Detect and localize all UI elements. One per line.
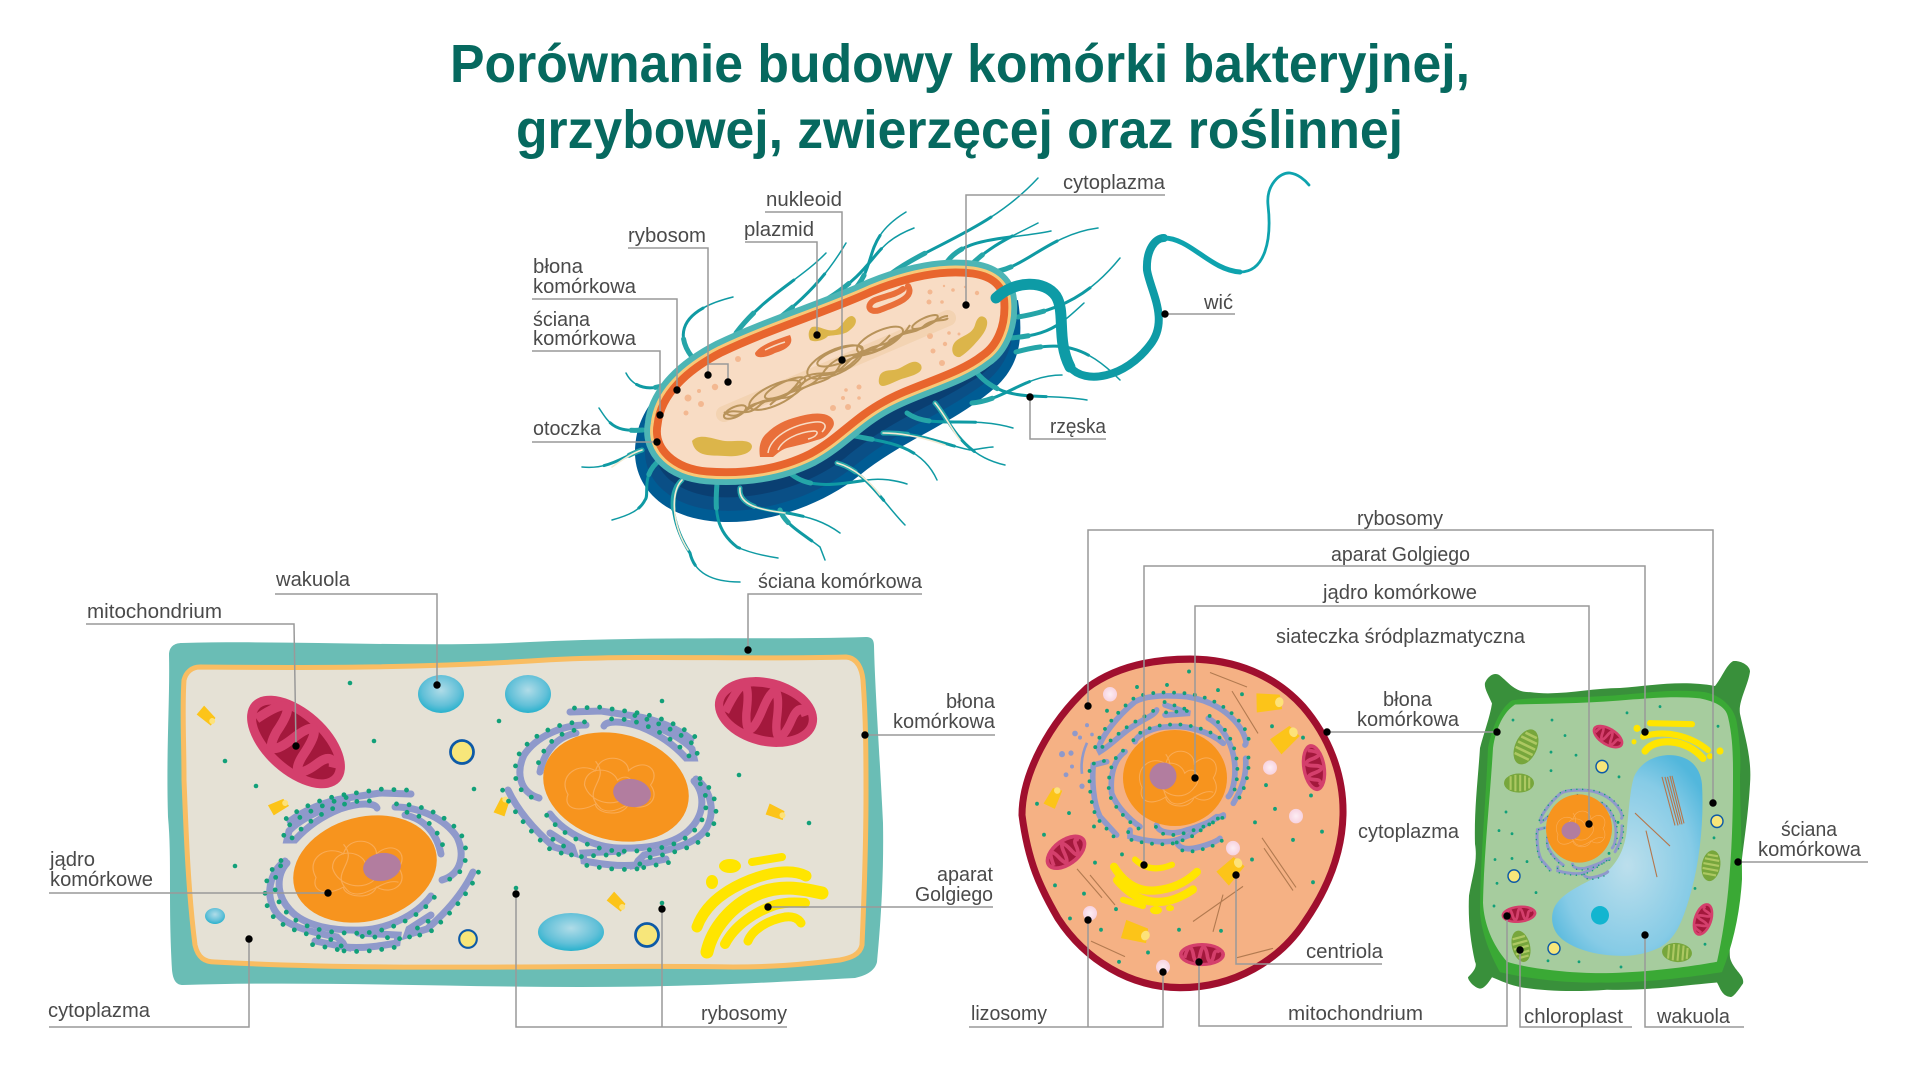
Golgi apparatus <box>1114 860 1197 914</box>
label: aparat Golgiego: aparat <box>937 864 993 886</box>
centrioles <box>195 704 788 915</box>
Golgi apparatus <box>697 857 822 952</box>
label: chloroplast <box>1516 946 1632 1028</box>
cell membrane and cytoplasm <box>183 657 866 967</box>
cell envelope and cytoplasm <box>657 272 1004 472</box>
label: mitochondrium <box>86 601 300 750</box>
vacuole contents <box>1591 776 1684 925</box>
label: ściana komórkowa: ściana komórkowa <box>758 571 923 593</box>
label: błona komórkowa <box>861 691 996 739</box>
cell body <box>1022 659 1343 988</box>
label: rzęska <box>1026 393 1107 439</box>
label: aparat Golgiego <box>1140 544 1649 869</box>
label: błona komórkowa: komórkowa <box>893 711 996 733</box>
label: błona komórkowa: błona <box>533 256 584 278</box>
label: błona komórkowa: komórkowa <box>533 276 637 298</box>
label: jądro komórkowe: jądro <box>49 849 95 871</box>
cell membrane <box>1480 691 1742 983</box>
label: wakuola <box>1641 931 1744 1028</box>
label: siateczka śródplazmatyczna: siateczka śródplazmatyczna <box>1276 626 1526 648</box>
label: wić: wić <box>1203 292 1233 314</box>
label: ściana komórkowa <box>532 309 664 419</box>
label: ściana komórkowa <box>1734 819 1868 866</box>
label: centriola <box>1232 871 1384 964</box>
endoplasmic reticulum and nucleus <box>1536 789 1624 879</box>
label: cytoplazma <box>48 935 253 1027</box>
label: rybosom <box>628 225 732 386</box>
label: jądro komórkowe: komórkowe <box>50 869 153 891</box>
illustration: animal cell <box>1022 659 1343 988</box>
illustration: bacterium <box>582 173 1309 582</box>
mitochondria <box>1039 742 1330 966</box>
smooth ER fragments <box>1059 723 1094 789</box>
ribosomes <box>1035 670 1324 964</box>
label: ściana komórkowa: ściana <box>533 309 591 331</box>
cell wall <box>1468 661 1750 997</box>
title: grzybowej, zwierzęcej oraz roślinnej <box>516 100 1403 160</box>
label: rybosomy: rybosomy <box>1357 508 1443 530</box>
vesicles <box>1508 760 1723 955</box>
shared labels: animal and plant cells <box>1084 508 1717 1026</box>
label: lizosomy: lizosomy <box>971 1003 1047 1025</box>
label: ściana komórkowa: komórkowa <box>533 328 637 350</box>
label: ściana komórkowa <box>744 571 923 654</box>
label: rzęska: rzęska <box>1050 416 1107 438</box>
panel: animal cell <box>969 659 1460 1027</box>
panel: plant cell <box>1468 661 1868 1028</box>
vesicles <box>450 740 658 948</box>
label: mitochondrium: mitochondrium <box>1288 1003 1423 1025</box>
label: otoczka <box>532 418 661 446</box>
label: wakuola: wakuola <box>275 569 351 591</box>
endoplasmic reticulum and nucleus 1 <box>265 789 478 951</box>
label: plazmid <box>744 219 821 339</box>
centrioles <box>1042 690 1303 951</box>
label: rybosomy <box>512 890 787 1027</box>
pili and fimbriae <box>582 178 1120 582</box>
lysosomes <box>1083 687 1303 974</box>
label: cytoplazma: cytoplazma <box>48 1000 151 1022</box>
label: centriola: centriola <box>1306 941 1384 963</box>
label: błona komórkowa <box>1323 689 1501 736</box>
label: jądro komórkowe <box>1191 582 1593 828</box>
label: mitochondrium <box>1195 912 1511 1026</box>
ribosomes <box>1493 705 1719 968</box>
ribosomes <box>223 681 811 905</box>
central vacuole <box>1552 755 1702 956</box>
label: jądro komórkowe: jądro komórkowe <box>1322 582 1477 604</box>
label: aparat Golgiego <box>764 864 993 911</box>
mitochondria <box>230 667 825 806</box>
label: rybosomy <box>1084 508 1717 807</box>
capsule back <box>635 300 1020 522</box>
nucleoid <box>722 312 948 422</box>
label: rybosom: rybosom <box>628 225 706 247</box>
label: ściana komórkowa: ściana <box>1781 819 1838 841</box>
panel: fungal cell <box>48 569 996 1027</box>
Golgi apparatus <box>1632 723 1724 759</box>
label: błona komórkowa: komórkowa <box>1357 709 1460 731</box>
label: aparat Golgiego: aparat Golgiego <box>1331 544 1470 566</box>
endoplasmic reticulum and nucleus <box>1089 692 1249 852</box>
label: cytoplazma: cytoplazma <box>1358 821 1460 843</box>
cell wall <box>167 637 883 987</box>
label: mitochondrium: mitochondrium <box>87 601 222 623</box>
illustration: plant cell <box>1468 661 1750 997</box>
cytoskeleton fibres <box>1077 673 1296 958</box>
mesosomes <box>755 286 909 457</box>
cream cores of fimbriae <box>612 403 960 550</box>
label: ściana komórkowa: komórkowa <box>1758 839 1862 861</box>
inclusions <box>692 316 987 456</box>
label: rybosomy: rybosomy <box>701 1003 787 1025</box>
label: wakuola <box>275 569 441 689</box>
cytoplasm <box>1483 697 1733 973</box>
mitochondria <box>1501 720 1717 939</box>
endoplasmic reticulum and nucleus 2 <box>503 707 716 869</box>
label: wić <box>1161 292 1235 318</box>
label: lizosomy <box>969 916 1167 1027</box>
chloroplasts <box>1504 725 1723 964</box>
title: Porównanie budowy komórki bakteryjnej, <box>450 34 1470 94</box>
label: błona komórkowa: błona <box>1383 689 1433 711</box>
label: aparat Golgiego: Golgiego <box>915 884 993 906</box>
flagellum <box>996 173 1309 377</box>
label: cytoplazma <box>962 172 1166 309</box>
label: jądro komórkowe <box>49 849 332 897</box>
label: otoczka: otoczka <box>533 418 602 440</box>
vacuoles <box>205 675 604 951</box>
label: nukleoid <box>765 189 846 364</box>
title <box>450 34 1470 160</box>
label: chloroplast: chloroplast <box>1524 1006 1623 1028</box>
ribosomes in cytoplasm <box>684 285 979 416</box>
label: błona komórkowa <box>532 256 681 394</box>
label: cytoplazma: cytoplazma <box>1063 172 1166 194</box>
panel: bacterial cell <box>532 172 1309 582</box>
label: nukleoid: nukleoid <box>766 189 842 211</box>
label: plazmid: plazmid <box>744 219 814 241</box>
label: wakuola: wakuola <box>1656 1006 1731 1028</box>
label: błona komórkowa: błona <box>946 691 996 713</box>
